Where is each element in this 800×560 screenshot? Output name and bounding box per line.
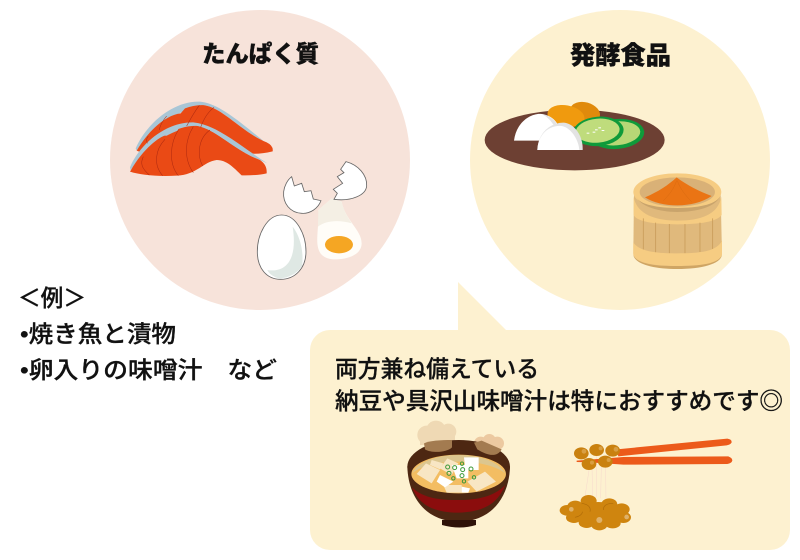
panel: fermented foods circle [470, 10, 770, 310]
left shell [284, 177, 321, 213]
right shell [333, 162, 367, 200]
panel: speech bubble [310, 282, 790, 550]
text: examples list: •卵入りの味噌汁 など [20, 357, 277, 383]
beans held [574, 444, 620, 470]
text: examples list: •焼き魚と漬物 [20, 321, 176, 347]
text: bubble message: 納豆や具沢山味噌汁は特におすすめです◎ [335, 388, 783, 414]
icon: natto and chopsticks [560, 439, 732, 530]
icon: pickles on a plate [485, 99, 665, 170]
chopsticks [577, 439, 732, 465]
text: bubble message [335, 356, 783, 414]
text: bubble message: 両方兼ね備えている [335, 356, 539, 382]
heading: fermented foods: 発酵食品 [570, 42, 671, 70]
text: examples list [18, 285, 277, 383]
text: examples list: ＜例＞ [18, 285, 86, 311]
icon: eggs [257, 162, 367, 279]
icon: miso barrel [633, 173, 722, 269]
natto strings [585, 453, 606, 499]
icon: miso soup bowl [407, 421, 510, 527]
whole egg [257, 215, 306, 279]
panel: protein circle [110, 10, 410, 310]
egg white and yolk [317, 198, 362, 259]
natto pile [560, 495, 631, 530]
heading: protein: たんぱく質 [202, 41, 319, 67]
icon: salmon fillets [130, 102, 273, 176]
